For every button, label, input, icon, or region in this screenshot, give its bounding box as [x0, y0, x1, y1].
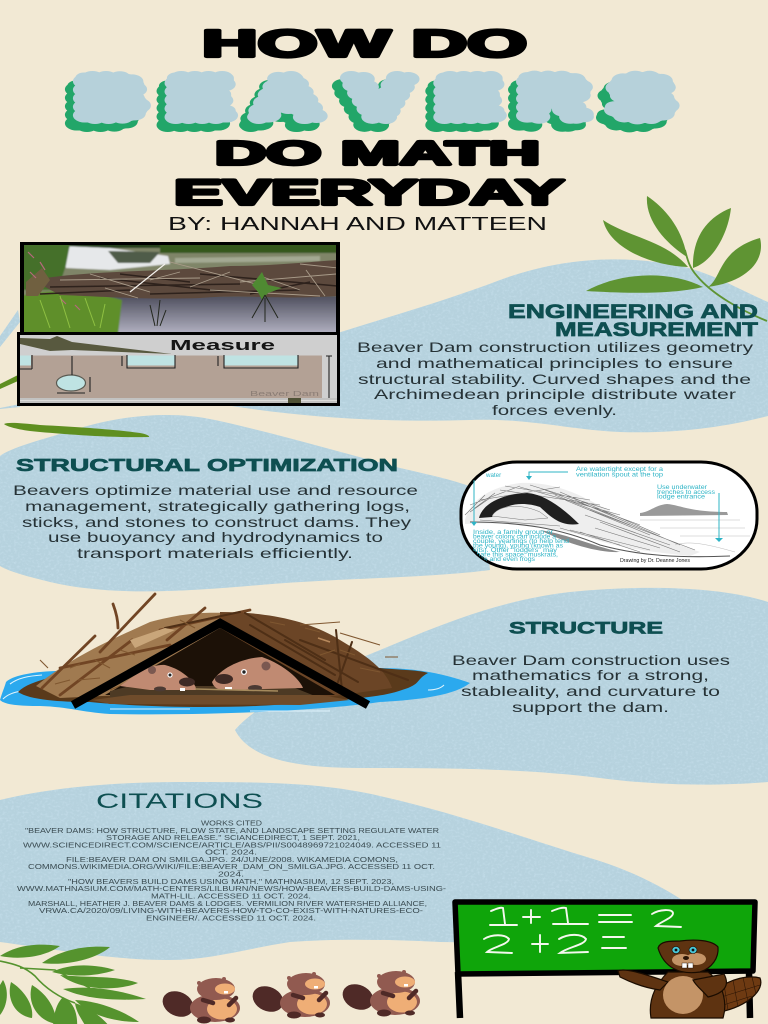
- text: citations list: VRWA.CA/2020/09/LIVING-WITH-BEAVERS-HOW-TO-CO-EXIST-WITH-NATURES-ECO-: [39, 906, 424, 915]
- text: structural optimization paragraph: management, strategically gathering logs,: [25, 499, 410, 514]
- title: [70, 24, 672, 212]
- heading: citations: CITATIONS: [96, 790, 263, 813]
- lodge annotations: water: [485, 472, 501, 479]
- text: structural optimization paragraph: transport materials efficiently.: [77, 546, 353, 561]
- diagram measure label: Measure: [170, 338, 275, 354]
- panel: lodge cross-section drawing: [461, 462, 757, 569]
- text: structural optimization paragraph: use buoyancy and hydrodynamics to: [48, 530, 383, 545]
- text: structure paragraph: Beaver Dam construction uses: [452, 653, 730, 668]
- chalk sums: [484, 908, 681, 953]
- teacher head: [658, 940, 718, 973]
- text: citations list: WWW.SCIENCEDIRECT.COM/SCIENCE/ARTICLE/ABS/PII/S0048969721024049. ACCESSED 11: [23, 840, 441, 850]
- panel: lodge cross-section drawing: the young), young (known as: [473, 542, 563, 550]
- heading: structure: STRUCTURE: [509, 618, 663, 638]
- panel: lodge cross-section drawing: Are watertight except for a: [576, 466, 664, 473]
- lodge sticks: [42, 594, 250, 695]
- chalkboard: [455, 902, 755, 1018]
- text: citations list: WWW.MATHNASIUM.COM/MATH-CENTERS/LILBURN/NEWS/HOW-BEAVERS-BUILD-DAMS-USING-: [17, 884, 447, 893]
- title line: do math: DO MATH: [215, 134, 540, 172]
- illustration: beaver lodge: [0, 594, 470, 714]
- panel: lodge cross-section drawing: mice and even frogs: [473, 556, 535, 563]
- chalkboard legs: [458, 972, 750, 1018]
- lodge roof chevron: [73, 623, 368, 705]
- panel: lodge cross-section drawing: share this space: muskrats,: [473, 552, 558, 558]
- leaf fragment behind diagram: [0, 375, 18, 389]
- heading: engineering and measurement: ENGINEERING AND: [508, 302, 758, 323]
- teacher arm: [618, 970, 668, 990]
- lodge opening: [105, 628, 335, 695]
- panel: lodge cross-section drawing: couple, yearlings (to help tend: [473, 538, 570, 545]
- icon: beaver 2: [248, 972, 330, 1018]
- text: engineering paragraph: Beaver Dam construction utilizes geometry: [357, 340, 753, 355]
- text: structure paragraph: stableality, and curvature to: [461, 684, 720, 699]
- beaver right: [212, 657, 303, 691]
- panel: lodge cross-section drawing: beaver colony can include a: [473, 534, 557, 540]
- diagram dam label: Beaver Dam: [250, 389, 319, 398]
- panel: lodge cross-section drawing: Use underwater: [657, 484, 707, 491]
- text: structure paragraph: support the dam.: [512, 700, 669, 715]
- chalkboard surface: [455, 902, 755, 974]
- text: citations list: ENGINEER/. ACCESSED 11 OCT. 2024.: [146, 913, 316, 922]
- diagram arrow: [20, 336, 172, 354]
- text: engineering paragraph: Archimedean principle distribute water: [374, 387, 737, 402]
- title line: everyday: EVERYDAY: [174, 174, 564, 212]
- title line: how do: HOW DO: [202, 24, 527, 66]
- text: structure paragraph: mathematics for a strong,: [472, 668, 709, 683]
- photo water and bank: [20, 240, 340, 334]
- lodge credit: Drawing by Dr. Deanne Jones: [620, 558, 690, 564]
- panel: lodge cross-section drawing: Inside, a family group or: [473, 529, 553, 536]
- icon: beaver 3: [338, 970, 420, 1016]
- icon: leaf sprig top right: [586, 196, 767, 321]
- text: citations list: "HOW BEAVERS BUILD DAMS USING MATH." MATHNASIUM, 12 SEPT. 2023,: [68, 877, 394, 886]
- title word: beavers: BEAVERS: [78, 66, 672, 130]
- lodge mud base: [18, 668, 428, 707]
- text: citations list: FILE:BEAVER DAM ON SMILGA.JPG. 24/JUNE/2008. WIKAMEDIA COMONS,: [66, 855, 398, 864]
- long leaf left: [4, 423, 149, 437]
- icon: leaf branch bottom left: [0, 945, 146, 1024]
- text: structural optimization paragraph: [13, 483, 418, 561]
- text: engineering paragraph: forces evenly.: [492, 403, 617, 418]
- photo: beaver dam: [20, 240, 340, 334]
- beaver left: [120, 665, 196, 692]
- text: citations list: STORAGE AND RELEASE." SCIANCEDIRECT, 1 SEPT. 2021,: [106, 833, 360, 842]
- photo dam: [26, 252, 338, 328]
- teacher body: [650, 972, 725, 1018]
- text: structural optimization paragraph: sticks, and stones to construct dams. They: [22, 515, 411, 530]
- text: structural optimization paragraph: Beavers optimize material use and resource: [13, 483, 418, 498]
- byline: BY: HANNAH AND MATTEEN: [168, 213, 547, 234]
- text: citations list: MATH-LIL. ACCESSED 11 OCT. 2024.: [151, 892, 311, 901]
- panel: lodge cross-section drawing: ventilation spout at the top: [576, 472, 664, 478]
- panel: lodge cross-section drawing: kits). Other "lodgers" may: [473, 547, 558, 554]
- text: citations list: COMMONS.WIKIMEDIA.ORG/WIKI/FILE:BEAVER_DAM_ON_SMILGA.JPG. ACCESSED 11 OCT.: [28, 862, 435, 871]
- panel: lodge cross-section drawing: lodge entrance: [657, 494, 706, 500]
- title word: beavers: BEAVERS: [70, 74, 664, 138]
- text: citations list: 2024.: [218, 870, 244, 878]
- text: citations list: [17, 818, 447, 922]
- title word: beavers: BEAVERS: [78, 66, 672, 130]
- heading: structural optimization: STRUCTURAL OPTIMIZATION: [16, 455, 398, 475]
- teacher tail: [717, 977, 761, 1012]
- diagram: measure: [17, 332, 340, 406]
- blue blob: citations section: [0, 782, 690, 960]
- blue blob: structural optimization section: [0, 415, 490, 591]
- blue blob: structure section: [235, 588, 768, 785]
- lodge dome: [36, 613, 225, 698]
- heading: engineering and measurement: [508, 302, 759, 341]
- panel: lodge cross-section drawing: trenches to access: [657, 489, 715, 496]
- lodge water: [0, 668, 470, 714]
- text: structure paragraph: [452, 653, 730, 715]
- lodge arrows: [474, 472, 719, 538]
- blue blob: engineering section: [0, 259, 768, 432]
- text: engineering paragraph: [357, 340, 753, 418]
- text: citations list: MARSHALL, HEATHER J. BEAVER DAMS & LODGES. VERMILION RIVER WATERSHED ALLIANCE,: [28, 899, 427, 908]
- heading: engineering and measurement: MEASUREMENT: [555, 320, 759, 341]
- text: citations list: OCT. 2024.: [205, 848, 257, 857]
- text: citations list: WORKS CITED: [201, 818, 262, 828]
- title word: beavers: BEAVERS: [70, 74, 664, 138]
- text: engineering paragraph: and mathematical principles to ensure: [376, 356, 733, 371]
- icon: teacher beaver: [618, 940, 761, 1018]
- icon: beaver 1: [158, 977, 240, 1024]
- text: citations list: "BEAVER DAMS: HOW STRUCTURE, FLOW STATE, AND LANDSCAPE SETTING REGULATE WATER: [25, 826, 439, 835]
- lodge sketch: [465, 483, 700, 556]
- text: engineering paragraph: structural stability. Curved shapes and the: [358, 372, 751, 387]
